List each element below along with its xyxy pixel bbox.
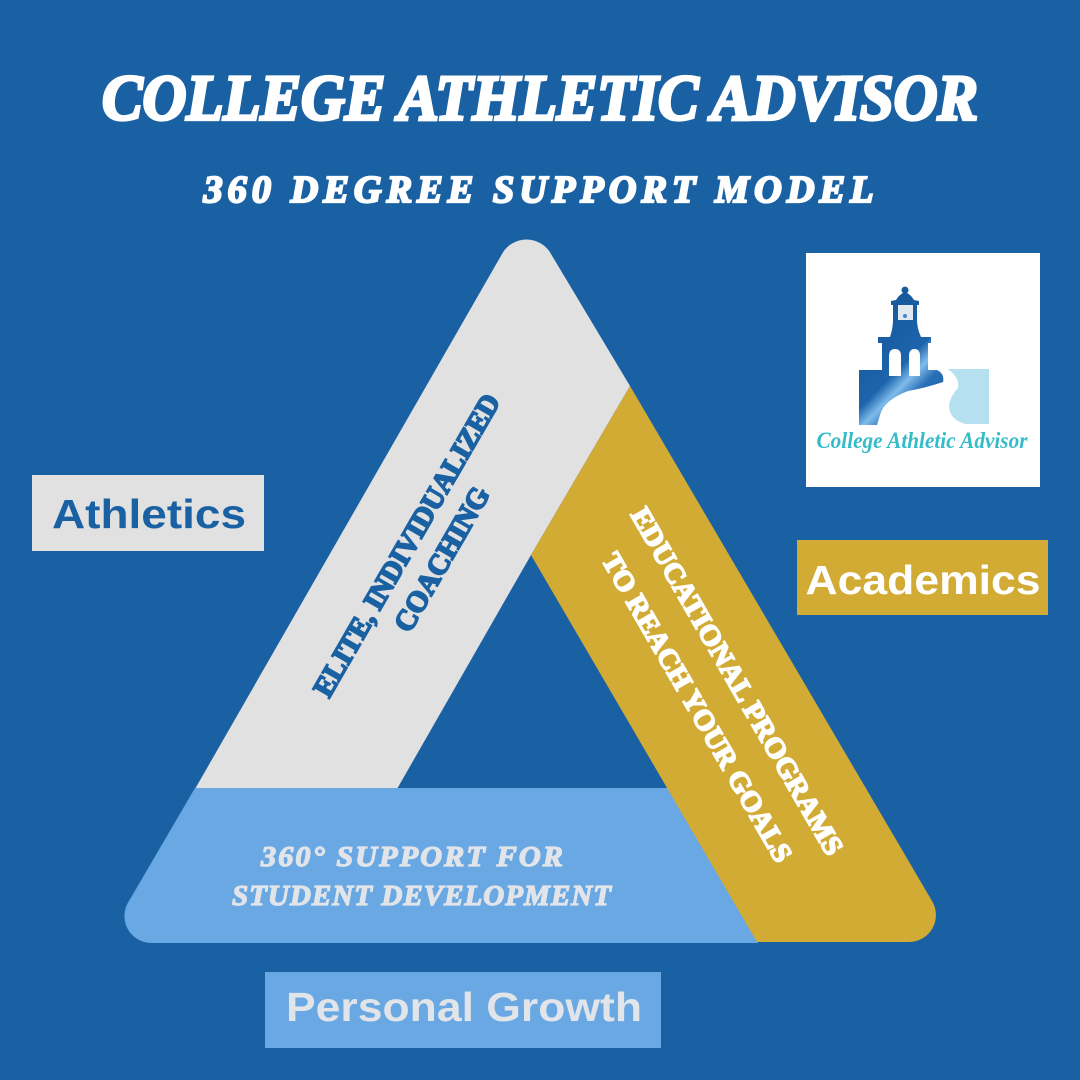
panel: academics side (gold) <box>531 386 936 942</box>
text: personal growth side: 360° SUPPORT FOR <box>260 841 565 873</box>
panel: personal growth side (light blue) <box>124 788 758 943</box>
logo <box>806 253 1040 487</box>
triangle diagram <box>124 240 936 943</box>
text: athletics side: ELITE, INDIVIDUALIZED <box>307 389 507 702</box>
label: Athletics: Athletics <box>52 491 246 537</box>
logo wordmark: College Athletic Advisor <box>816 428 1028 453</box>
subtitle: 360 DEGREE SUPPORT MODEL <box>202 169 879 211</box>
text: academics side: TO REACH YOUR GOALS <box>595 548 798 868</box>
label: Athletics <box>32 475 264 551</box>
title: COLLEGE ATHLETIC ADVISOR <box>102 62 978 134</box>
panel: athletics side (grey) <box>195 240 630 789</box>
text: personal growth side: STUDENT DEVELOPMENT <box>232 880 612 912</box>
icon: clock tower building <box>859 287 943 425</box>
text: personal growth side <box>232 841 612 912</box>
text: academics side: EDUCATIONAL PROGRAMS <box>624 503 849 861</box>
label: Academics: Academics <box>806 557 1040 603</box>
label: Personal Growth: Personal Growth <box>286 984 642 1030</box>
icon: river shape <box>948 369 989 424</box>
text: athletics side: COACHING <box>388 481 497 638</box>
label: Academics <box>797 540 1048 615</box>
label: Personal Growth <box>265 972 661 1048</box>
